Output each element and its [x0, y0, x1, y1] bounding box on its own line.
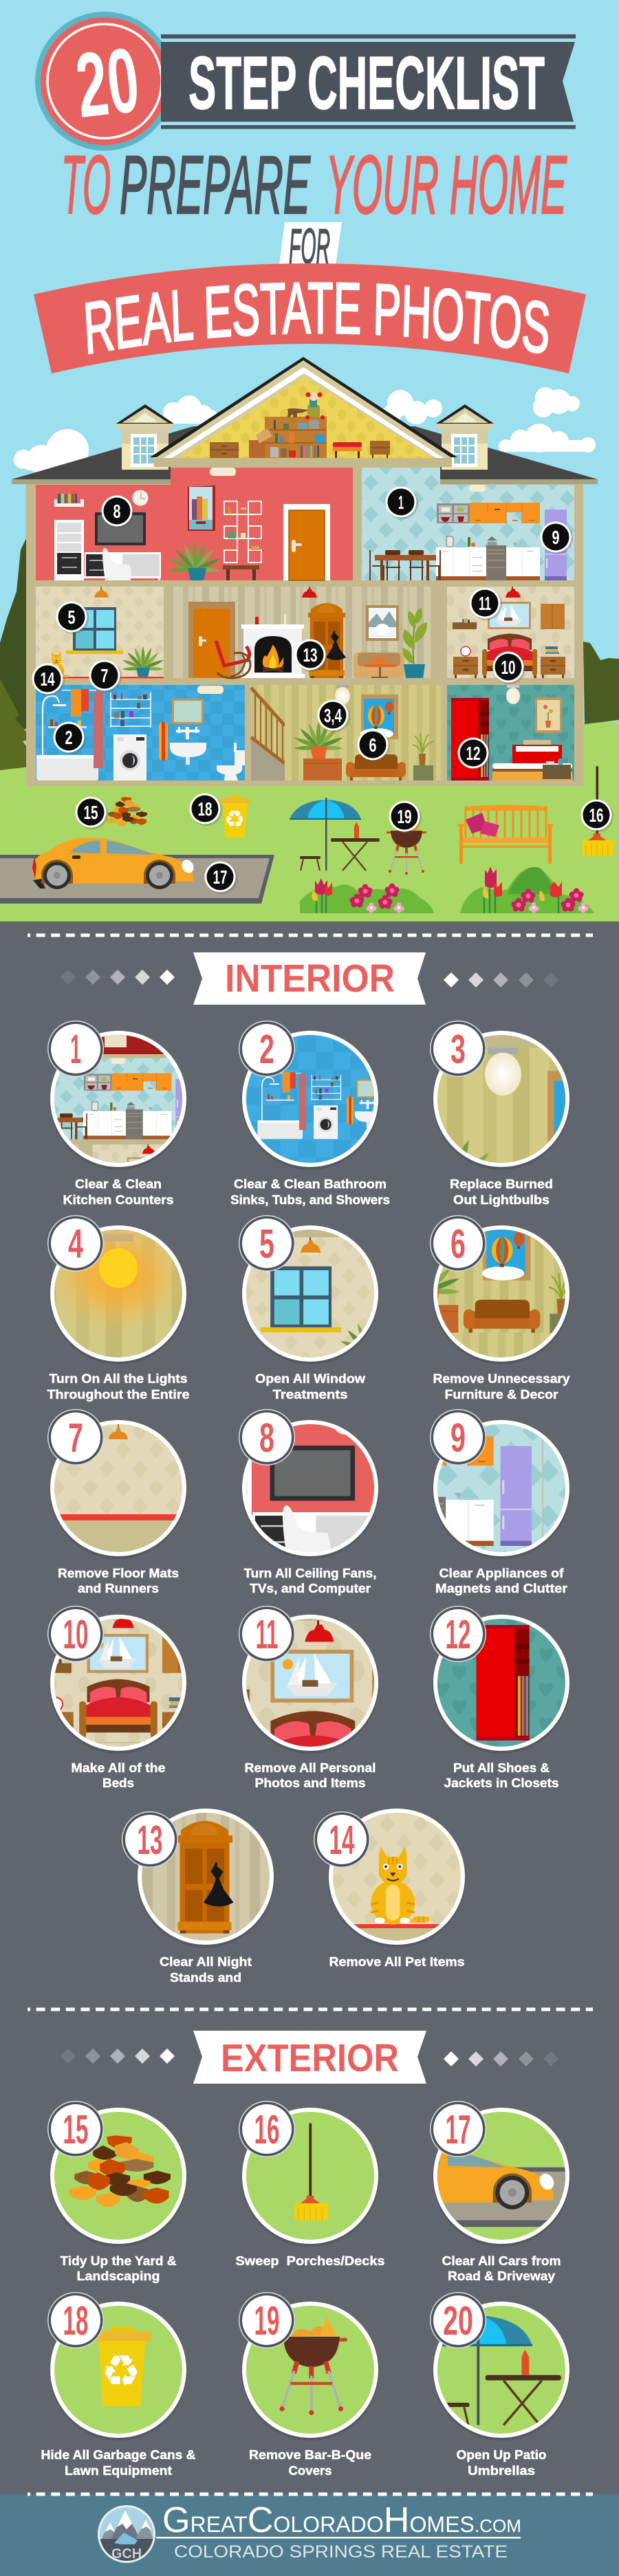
illustration: lightbulb: [433, 1031, 570, 1170]
step 14: [314, 1809, 466, 1969]
number badge 2: [239, 1020, 295, 1077]
caption 11: Remove All Personal: [245, 1761, 376, 1775]
number badge 5: 5: [259, 1221, 274, 1267]
exterior heading ribbon: EXTERIOR: [221, 2036, 399, 2080]
number badge 17: [430, 2101, 486, 2157]
step 16: [235, 2101, 385, 2268]
patio set with umbrella: [290, 798, 380, 871]
title badge: 20: [35, 12, 174, 151]
step 15: [47, 2101, 188, 2283]
marker 6: 6: [369, 734, 377, 756]
caption 10: Beds: [102, 1776, 134, 1790]
trees: [0, 538, 619, 770]
illustration: TV: [241, 1420, 379, 1559]
flower bed right: [460, 866, 594, 913]
number badge 4: 4: [68, 1221, 83, 1267]
number badge 5: [239, 1215, 295, 1271]
step 19: [239, 2292, 381, 2478]
caption 20: [457, 2448, 546, 2478]
illustration: picture: [241, 1615, 379, 1754]
number badge 12: [430, 1606, 486, 1662]
step 9: [430, 1409, 570, 1595]
caption 2: [230, 1177, 390, 1207]
caption 5: [255, 1372, 366, 1401]
number badge 19: 19: [254, 2298, 279, 2344]
caption 12: Put All Shoes &: [453, 1761, 550, 1775]
number badge 13: 13: [138, 1818, 162, 1863]
house number markers: [32, 487, 613, 894]
broom: [583, 766, 613, 856]
marker 13: 13: [303, 644, 318, 666]
number badge 18: 18: [63, 2298, 88, 2344]
number badge 20: [430, 2292, 486, 2348]
interior heading ribbon: [193, 952, 426, 1005]
exterior right diamonds: [444, 2051, 558, 2066]
dashed separators: [28, 935, 593, 2494]
marker 9: [541, 521, 573, 554]
sky background: [0, 0, 619, 921]
caption 20: Open Up Patio: [457, 2448, 546, 2462]
title line: to prepare your home: TO: [61, 139, 111, 231]
caption 6: Furniture & Decor: [444, 1388, 558, 1401]
marker 12: [458, 737, 490, 770]
caption 2: Clear & Clean Bathroom: [234, 1177, 387, 1191]
number badge 18: [47, 2292, 104, 2348]
for card: [279, 219, 342, 274]
marker 14: [32, 663, 65, 696]
number badge 16: 16: [254, 2107, 279, 2152]
number badge 15: 15: [63, 2107, 88, 2152]
marker 17: 17: [213, 866, 227, 888]
logo tagline: COLORADO SPRINGS REAL ESTATE: [174, 2542, 508, 2562]
illustration: wardrobe: [137, 1809, 275, 1947]
step 3: [430, 1020, 570, 1208]
illustration: lights on: [50, 1225, 187, 1364]
number badge 11: [239, 1606, 295, 1662]
illustration: closet: [433, 1615, 571, 1754]
kitchen: [362, 468, 574, 580]
caption 9: Magnets and Clutter: [435, 1582, 567, 1595]
illustration: broom: [241, 2107, 381, 2247]
master bed: [482, 634, 537, 678]
step 4: [46, 1215, 191, 1401]
upstairs middle room: [173, 587, 431, 678]
step 17: [430, 2101, 570, 2283]
flower bed left: [300, 878, 434, 913]
step 1: [47, 1020, 187, 1205]
illustration: leaf pile: [48, 2107, 188, 2247]
right dormer: [436, 404, 494, 470]
garden bench: [458, 805, 553, 864]
caption 11: [245, 1761, 376, 1790]
number badge 10: 10: [63, 1612, 88, 1657]
marker 10: 10: [501, 657, 516, 678]
caption 7: [58, 1567, 179, 1595]
lower living room: [285, 685, 441, 781]
caption 9: Clear Appliances of: [439, 1567, 565, 1580]
caption 16: Sweep Porches/Decks: [235, 2254, 385, 2268]
number badge 15: [47, 2101, 104, 2157]
caption 4: Turn On All the Lights: [50, 1372, 187, 1386]
caption 15: [61, 2254, 176, 2283]
recycling bin: ♻: [224, 806, 245, 833]
bathroom: [36, 685, 245, 781]
attic furniture: [210, 392, 390, 458]
caption 10: Make All of the: [72, 1761, 165, 1775]
logo emblem: GCH: [111, 2546, 142, 2562]
caption 5: Treatments: [272, 1388, 348, 1401]
marker 7: [89, 660, 122, 692]
illustration: fridge: [433, 1420, 570, 1559]
logo wordmark: GREATCOLORADOHOMES.COM: [162, 2500, 521, 2540]
exterior left diamonds: [61, 2049, 175, 2064]
number badge 10: [47, 1606, 104, 1662]
caption 18: Lawn Equipment: [65, 2464, 172, 2478]
step 11: [239, 1606, 379, 1788]
marker 8: 8: [113, 501, 121, 522]
interior heading ribbon: INTERIOR: [225, 957, 395, 1001]
number badge 11: 11: [256, 1612, 278, 1657]
caption 17: Clear All Cars from: [442, 2254, 561, 2268]
living room: red: [36, 468, 353, 580]
number badge 19: [239, 2292, 295, 2348]
recycling bin: [219, 796, 250, 838]
caption 8: Turn All Ceiling Fans,: [243, 1567, 377, 1580]
step 20: [422, 2292, 574, 2478]
marker 19: 19: [398, 806, 411, 827]
number badge 1: [47, 1020, 104, 1077]
title line: to prepare your home: PREPARE: [120, 139, 311, 231]
upstairs right bedroom: [447, 587, 574, 678]
marker 18: 18: [198, 798, 212, 820]
caption 18: Hide All Garbage Cans &: [41, 2448, 195, 2462]
number badge 2: 2: [259, 1027, 274, 1072]
cat: [49, 651, 69, 678]
caption 20: Umbrellas: [468, 2464, 535, 2478]
caption 4: [47, 1372, 190, 1401]
caption 19: Remove Bar-B-Que: [249, 2448, 371, 2462]
caption 1: Kitchen Counters: [63, 1193, 173, 1207]
number badge 1: 1: [70, 1027, 81, 1072]
step 6: [430, 1215, 570, 1399]
caption 13: Stands and: [170, 1971, 241, 1985]
marker 3,4: [318, 700, 350, 732]
illustration: bed: [50, 1615, 187, 1754]
number badge 9: [430, 1409, 486, 1465]
caption 9: [435, 1567, 567, 1595]
step 5: [239, 1215, 379, 1399]
footer band: [0, 2494, 619, 2576]
illustration: car: [433, 2108, 570, 2247]
house wall frame: [26, 465, 583, 786]
driveway: [0, 855, 274, 904]
number badge 16: [239, 2101, 295, 2157]
number badge 8: [239, 1409, 295, 1465]
caption 6: Remove Unnecessary: [433, 1372, 569, 1386]
marker 16: 16: [589, 805, 604, 826]
caption 13: [160, 1955, 252, 1985]
marker 17: [205, 861, 237, 894]
left dormer: [116, 404, 174, 470]
illustration: recycling bin: [48, 2301, 188, 2441]
caption 1: [63, 1177, 173, 1207]
stairs: [251, 685, 285, 781]
caption 7: Remove Floor Mats: [58, 1567, 179, 1580]
marker 16: [580, 799, 613, 832]
caption 19: Covers: [289, 2464, 332, 2478]
number badge 6: [430, 1215, 486, 1271]
illustration: bathroom: [241, 1031, 379, 1170]
caption 15: Tidy Up the Yard &: [61, 2254, 176, 2268]
caption 11: Photos and Items: [254, 1776, 366, 1790]
step 7: [47, 1409, 188, 1595]
number badge 3: [430, 1020, 486, 1077]
marker 18: [190, 794, 222, 826]
number badge 12: 12: [446, 1612, 470, 1657]
interior left diamonds: [61, 970, 175, 985]
title badge: 20: 20: [71, 29, 144, 138]
roof: [12, 426, 598, 484]
caption 17: [442, 2254, 561, 2283]
step 8: [239, 1409, 379, 1595]
illustration: kitchen: [50, 1031, 187, 1170]
marker 2: 2: [65, 727, 73, 748]
number badge 3: 3: [450, 1027, 466, 1072]
illustration: floor runner: [48, 1419, 188, 1559]
caption 5: Open All Window: [255, 1372, 366, 1386]
caption 19: [249, 2448, 371, 2478]
caption 3: [450, 1177, 553, 1207]
marker 11: [469, 587, 502, 620]
caption 3: Replace Burned: [450, 1177, 553, 1191]
number badge 8: 8: [259, 1415, 274, 1461]
caption 6: [433, 1372, 569, 1401]
marker 8: [102, 495, 134, 528]
number badge 6: 6: [450, 1221, 466, 1267]
number badge 4: [47, 1215, 104, 1271]
caption 10: [72, 1761, 165, 1790]
marker 1: 1: [398, 492, 404, 513]
marker 9: 9: [552, 527, 560, 548]
number badge 14: [314, 1811, 370, 1868]
caption 3: Out Lightbulbs: [453, 1193, 550, 1207]
illustration: patio umbrella: [433, 2302, 570, 2441]
marker 5: [56, 601, 89, 634]
number badge 20: 20: [443, 2298, 473, 2344]
number badge 14: 14: [329, 1818, 355, 1863]
caption 8: [243, 1567, 377, 1595]
marker 5: 5: [67, 607, 76, 628]
caption 12: [444, 1761, 558, 1790]
step 10: [47, 1606, 187, 1788]
number badge 7: [47, 1409, 104, 1465]
step 12: [430, 1606, 571, 1790]
illustration: furniture: [433, 1225, 570, 1364]
marker 7: 7: [100, 665, 109, 686]
logo rule: [156, 2537, 521, 2539]
caption 17: Road & Driveway: [448, 2269, 555, 2283]
leaf pile: [106, 797, 147, 827]
clouds: [14, 387, 596, 474]
caption 2: Sinks, Tubs, and Showers: [230, 1193, 390, 1207]
caption 13: Clear All Night: [160, 1955, 252, 1969]
number badge 7: 7: [68, 1415, 83, 1461]
marker 13: [294, 640, 327, 672]
barbecue grill: [387, 820, 426, 875]
illustration: cat: [328, 1809, 466, 1947]
car: [32, 838, 196, 889]
number badge 13: [122, 1811, 178, 1868]
illustration: grill: [241, 2301, 381, 2441]
caption 12: Jackets in Closets: [444, 1776, 558, 1790]
caption 14: Remove All Pet Items: [329, 1955, 465, 1969]
caption 8: TVs, and Computer: [250, 1582, 371, 1595]
checklist gray panel: [0, 921, 619, 2494]
marker 19: [389, 800, 422, 833]
illustration: window: [241, 1225, 379, 1364]
house scene with yard: [0, 357, 619, 921]
caption 15: Landscaping: [77, 2269, 160, 2283]
marker 11: 11: [479, 593, 491, 614]
interior right diamonds: [444, 972, 558, 987]
caption 18: [41, 2448, 195, 2478]
lower right bedroom: [447, 685, 574, 781]
caption 4: Throughout the Entire: [47, 1388, 190, 1401]
number badge 9: 9: [450, 1415, 466, 1461]
logo emblem: [96, 2503, 158, 2566]
step 2: [230, 1020, 389, 1206]
marker 15: 15: [84, 802, 98, 823]
for card: FOR: [289, 219, 330, 274]
caption 7: and Runners: [78, 1582, 159, 1595]
grass lawn: [0, 722, 619, 921]
marker 15: [76, 796, 108, 829]
caption 1: Clear & Clean: [75, 1177, 162, 1191]
marker 12: 12: [466, 743, 480, 764]
number badge 17: 17: [446, 2107, 470, 2152]
marker 10: [492, 652, 525, 684]
marker 1: [385, 487, 418, 519]
upstairs left room: [36, 587, 164, 678]
marker 6: [358, 729, 390, 762]
marker 2: [54, 722, 86, 754]
step 13: [122, 1809, 275, 1985]
attic gable: [150, 357, 457, 467]
marker 14: 14: [40, 668, 55, 690]
marker 3,4: 3,4: [324, 705, 342, 726]
step 18: [41, 2292, 195, 2478]
red arched ribbon: real estate photos: REAL ESTATE PHOTOS: [85, 282, 549, 355]
